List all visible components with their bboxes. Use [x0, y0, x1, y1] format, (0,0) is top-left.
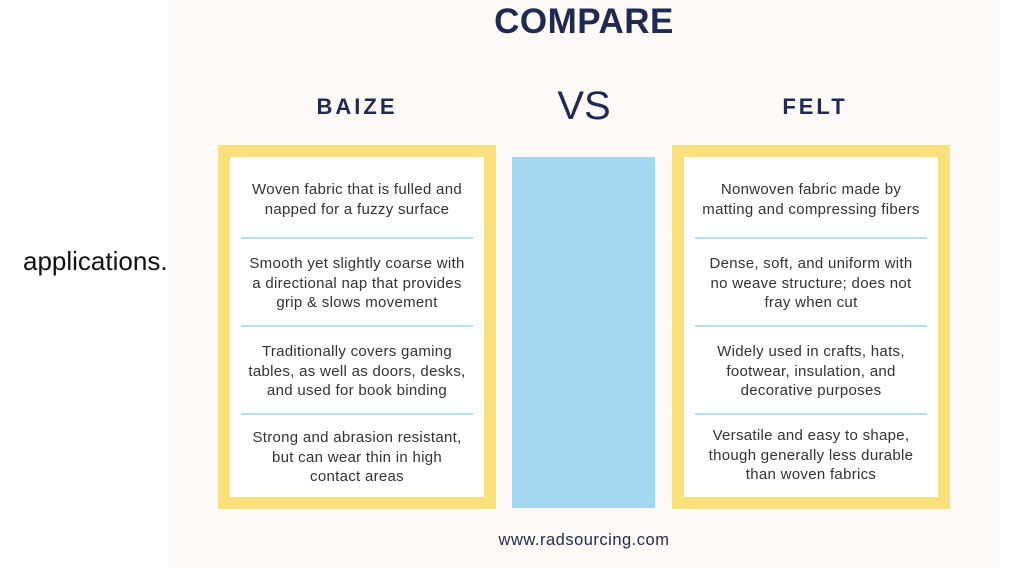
- baize row 2: [249, 255, 465, 311]
- felt row 1: [702, 181, 920, 218]
- felt row 3: Widely used in crafts, hats,: [717, 343, 905, 360]
- baize row 3: tables, as well as doors, desks,: [248, 362, 466, 380]
- felt row 2: [710, 255, 912, 311]
- baize row 3: Traditionally covers gaming: [262, 343, 452, 360]
- heading: vs: VS: [557, 84, 611, 128]
- felt row 3: footwear, insulation, and: [726, 362, 896, 380]
- panel: baize: [218, 145, 496, 509]
- baize row 1: napped for a fuzzy surface: [265, 200, 449, 218]
- felt row 3: decorative purposes: [741, 382, 881, 399]
- baize row 1: Woven fabric that is fulled and: [252, 181, 462, 198]
- heading: baize: BAIZE: [316, 94, 398, 119]
- felt row 4: though generally less durable: [709, 446, 913, 464]
- baize row 1: [252, 181, 462, 218]
- felt row 1: matting and compressing fibers: [702, 200, 920, 218]
- baize row 2: a directional nap that provides: [252, 274, 462, 292]
- felt row 2: fray when cut: [764, 294, 858, 311]
- side text: applications.: [23, 246, 168, 276]
- baize row 4: [252, 429, 462, 485]
- felt row 2: Dense, soft, and uniform with: [710, 255, 912, 272]
- baize row 3: and used for book binding: [267, 382, 447, 399]
- felt row 2: no weave structure; does not: [710, 274, 912, 292]
- footer url: www.radsourcing.com: [499, 531, 669, 549]
- baize row 2: grip & slows movement: [276, 294, 438, 311]
- baize row 2: Smooth yet slightly coarse with: [249, 255, 465, 272]
- title: COMPARE: [494, 2, 674, 41]
- baize row 4: contact areas: [310, 468, 404, 485]
- baize row 4: but can wear thin in high: [272, 448, 442, 466]
- felt row 4: Versatile and easy to shape,: [713, 427, 909, 444]
- felt row 4: [708, 427, 913, 483]
- baize row 3: [248, 343, 466, 399]
- panel: felt: [672, 145, 950, 509]
- felt row 1: Nonwoven fabric made by: [721, 181, 901, 198]
- baize row 4: Strong and abrasion resistant,: [252, 429, 462, 446]
- felt row 3: [717, 343, 905, 399]
- center bar: [512, 157, 655, 508]
- heading: felt: FELT: [782, 94, 848, 119]
- felt row 4: than woven fabrics: [746, 466, 876, 483]
